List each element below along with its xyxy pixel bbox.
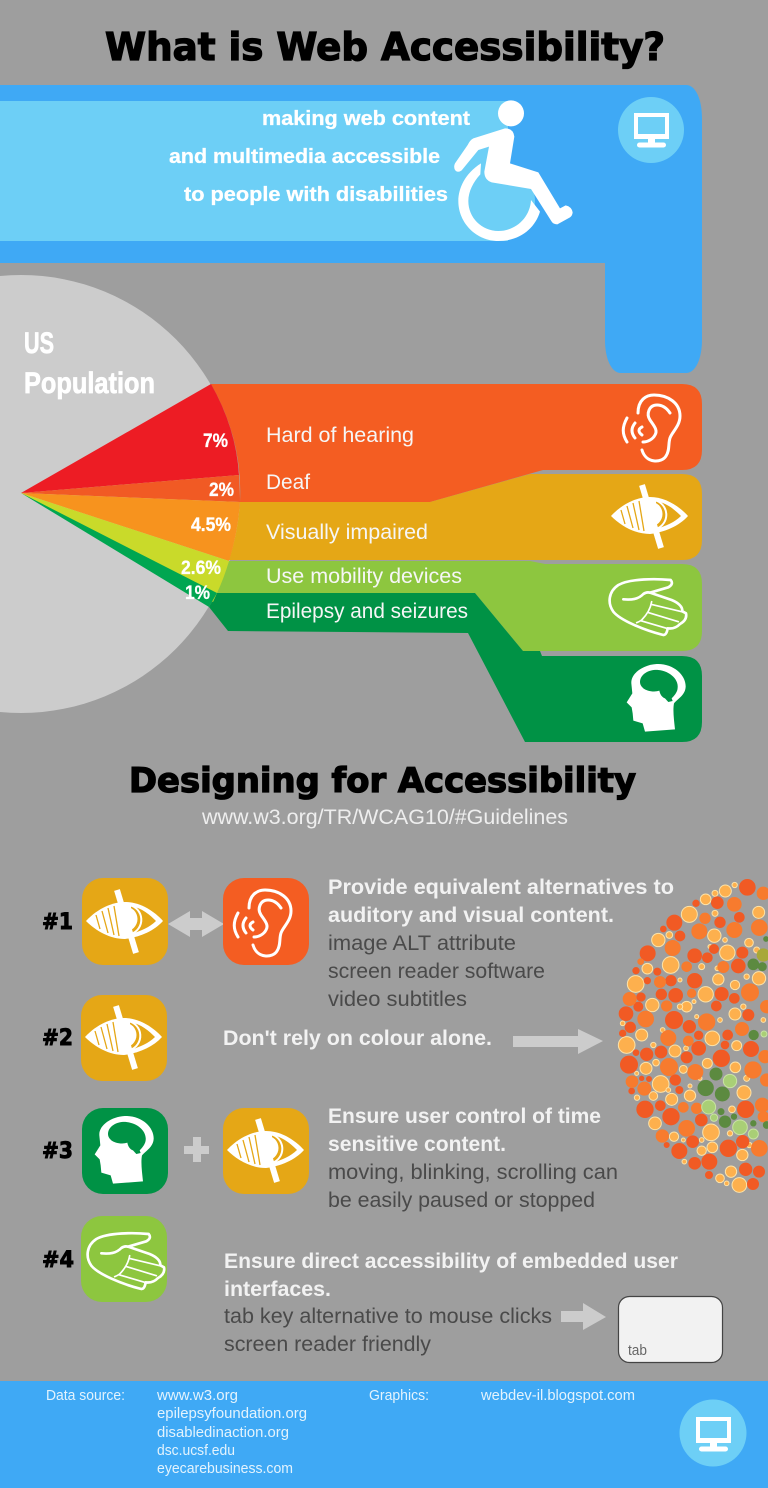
- category labels: Deaf: [266, 471, 310, 494]
- icon tile: ear: [223, 878, 309, 965]
- icon: hand: [610, 579, 686, 635]
- pie slice: 4.5 percent: [21, 493, 240, 561]
- definition text: to people with disabilities: [184, 184, 448, 206]
- icon: crossed eye: [611, 485, 688, 548]
- plus sign: [184, 1137, 209, 1162]
- guideline 4 text: interfaces.: [224, 1278, 331, 1301]
- pie slice: 2.6 percent: [21, 493, 229, 602]
- guideline 4 text: [224, 1250, 678, 1356]
- tab key: tab: [628, 1342, 647, 1359]
- pie slice: 2 percent: [21, 475, 240, 502]
- panel: US population chart: [0, 275, 702, 742]
- guideline 1 text: [328, 876, 674, 1011]
- guideline 3 text: Ensure user control of time: [328, 1105, 601, 1128]
- icon: computer badge: [680, 1400, 746, 1466]
- illustration: colour blindness test plate: [618, 880, 768, 1192]
- data source list: www.w3.org: [156, 1388, 238, 1404]
- guideline 1: [42, 876, 674, 1011]
- icon tile: crossed eye: [81, 995, 167, 1081]
- guideline 2: [42, 995, 603, 1081]
- icon tile: crossed eye: [82, 878, 168, 965]
- data source list: eyecarebusiness.com: [157, 1461, 293, 1477]
- panel: definition banner: [0, 85, 702, 373]
- double arrow: [168, 911, 224, 937]
- light blue band: [0, 101, 508, 241]
- percent labels: [181, 431, 234, 604]
- number 4: #4: [42, 1248, 74, 1273]
- tab key: [618, 1296, 722, 1362]
- definition text: making web content: [262, 108, 470, 130]
- percent labels: 2.6%: [181, 558, 221, 579]
- guideline 3 text: moving, blinking, scrolling can: [328, 1161, 618, 1184]
- guidelines url: www.w3.org/TR/WCAG10/#Guidelines: [201, 806, 568, 829]
- footer band: [0, 1381, 768, 1488]
- data source list: [156, 1388, 307, 1477]
- icon tile: hand: [81, 1216, 167, 1302]
- heading: US Population: Population: [24, 367, 155, 400]
- heading: US Population: US: [24, 327, 54, 360]
- data source list: dsc.ucsf.edu: [157, 1443, 235, 1459]
- number 2: #2: [42, 1026, 73, 1051]
- category labels: Hard of hearing: [266, 424, 414, 447]
- icon: computer badge: [618, 97, 684, 163]
- guideline 1 text: video subtitles: [328, 988, 467, 1011]
- guideline 4 text: tab key alternative to mouse clicks: [224, 1305, 552, 1328]
- percent labels: 2%: [209, 480, 234, 501]
- percent labels: 1%: [185, 583, 210, 604]
- graphics credit: webdev-il.blogspot.com: [480, 1388, 635, 1404]
- definition text: [169, 108, 470, 206]
- heading: designing for accessibility: Designing for Accessibility: [129, 761, 636, 801]
- footer: [0, 1381, 768, 1488]
- guideline 1 text: auditory and visual content.: [328, 904, 614, 927]
- guideline 1 text: screen reader software: [328, 960, 545, 983]
- data source label: Data source:: [46, 1388, 125, 1404]
- guideline 3 text: [328, 1105, 618, 1212]
- icon: wheelchair user: [454, 100, 573, 241]
- category labels: Use mobility devices: [266, 565, 462, 588]
- category labels: Epilepsy and seizures: [266, 600, 468, 623]
- band: hard of hearing and deaf: [211, 384, 702, 502]
- guideline 4 text: Ensure direct accessibility of embedded user: [224, 1250, 678, 1273]
- band: mobility devices: [217, 561, 702, 651]
- data source list: disabledinaction.org: [157, 1425, 289, 1441]
- percent labels: 4.5%: [191, 515, 231, 536]
- icon tile: crossed eye: [223, 1108, 309, 1194]
- percent labels: 7%: [203, 431, 228, 452]
- pie slice: 1 percent: [21, 493, 217, 607]
- definition text: and multimedia accessible: [169, 146, 440, 168]
- guideline 3 text: sensitive content.: [328, 1133, 506, 1156]
- icon: ear: [623, 395, 680, 461]
- category labels: [266, 424, 468, 623]
- pie slice: 7 percent: [21, 384, 239, 493]
- guideline 1 text: Provide equivalent alternatives to: [328, 876, 674, 899]
- arrow to tab key: [561, 1303, 606, 1330]
- guideline 2 text: Don't rely on colour alone.: [223, 1027, 492, 1050]
- guideline 4 text: screen reader friendly: [224, 1333, 431, 1356]
- title: What is Web Accessibility?: [105, 25, 665, 69]
- band: visually impaired: [229, 474, 702, 560]
- guideline 3 text: be easily paused or stopped: [328, 1189, 595, 1212]
- category labels: Visually impaired: [266, 521, 428, 544]
- icon: head with brain: [627, 664, 686, 732]
- icon tile: head with brain: [82, 1108, 168, 1194]
- graphics credit: Graphics:: [369, 1388, 429, 1404]
- guideline 3: [42, 1105, 618, 1212]
- number 3: #3: [42, 1139, 73, 1164]
- data source list: epilepsyfoundation.org: [157, 1406, 307, 1422]
- population circle: [0, 275, 240, 713]
- blue banner shape: [0, 85, 702, 373]
- graphics credit: [369, 1388, 635, 1404]
- guideline 1 text: image ALT attribute: [328, 932, 516, 955]
- guideline 4: [42, 1216, 722, 1362]
- band: epilepsy: [209, 593, 702, 742]
- arrow to plate: [513, 1029, 603, 1054]
- heading: US Population: [24, 327, 155, 400]
- number 1: #1: [42, 910, 73, 935]
